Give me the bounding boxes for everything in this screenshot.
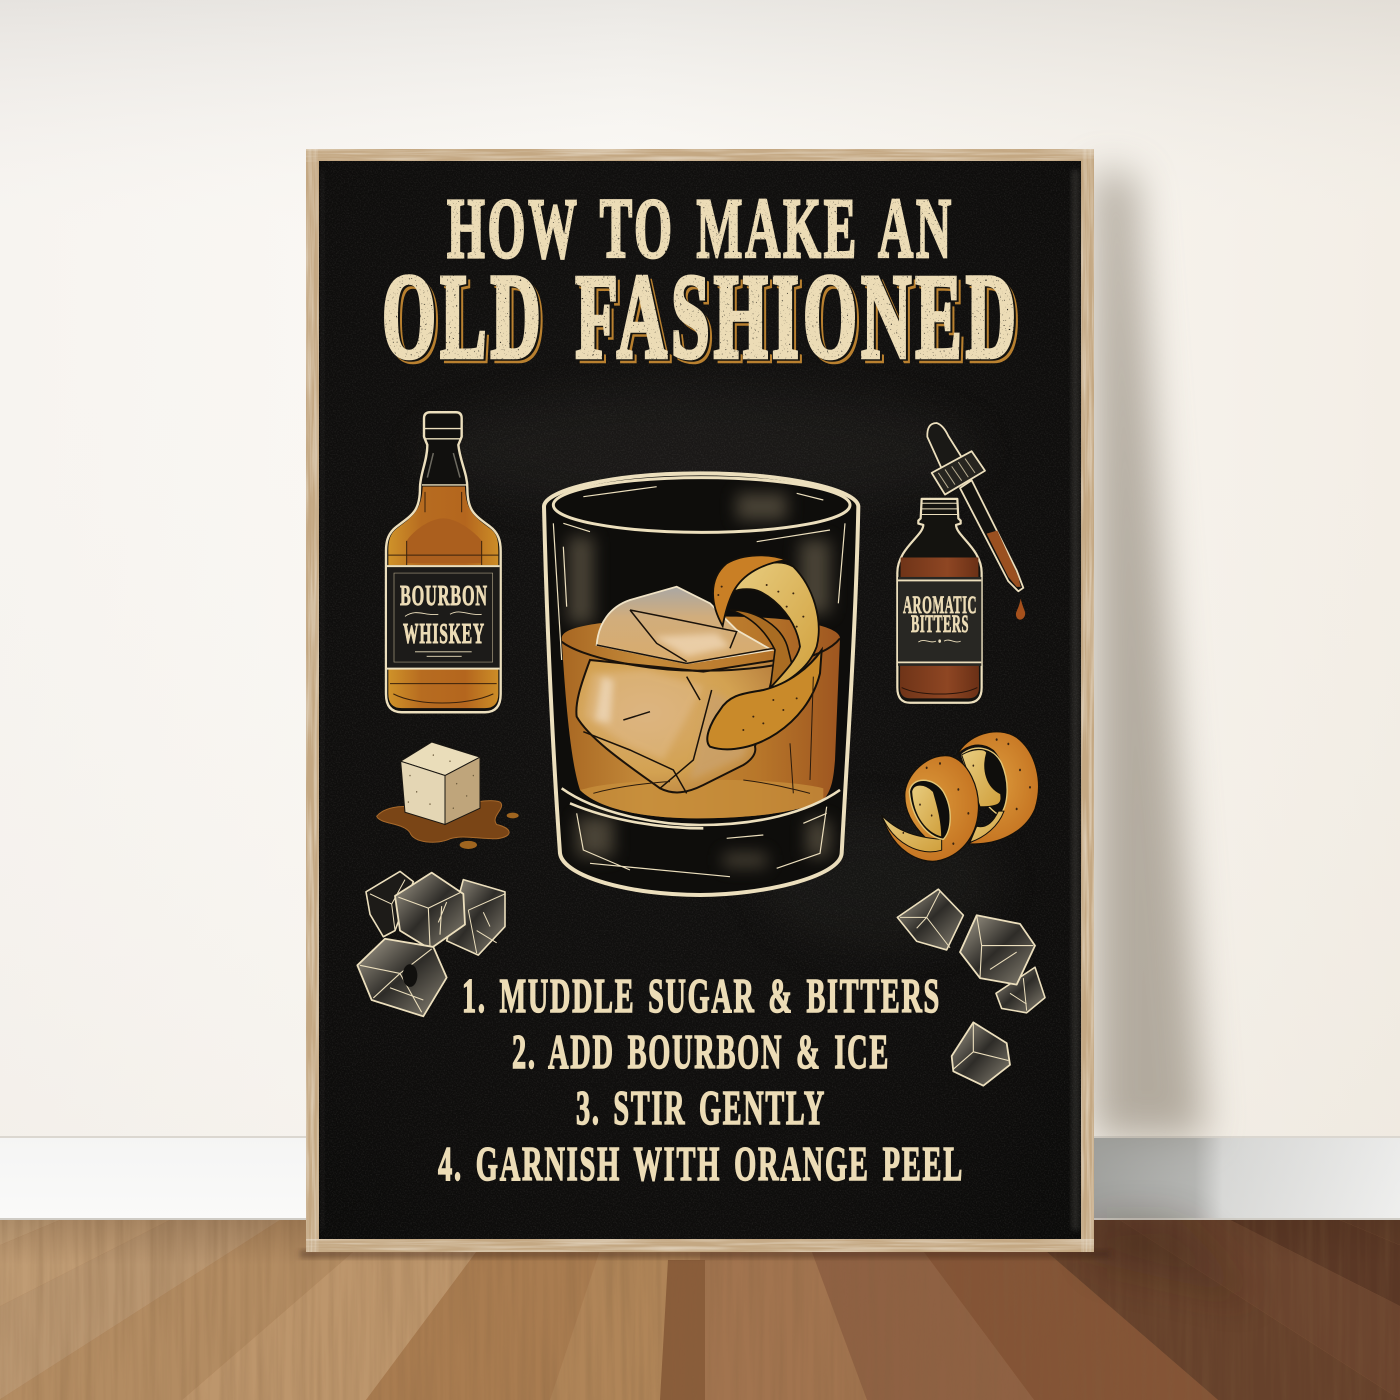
steps text xyxy=(438,968,964,1191)
cube speckles xyxy=(408,754,474,809)
title line 1: HOW TO MAKE AN xyxy=(447,180,954,276)
peel left lobe xyxy=(882,756,978,861)
peel right coil xyxy=(962,748,1007,815)
ice cube small xyxy=(996,967,1045,1013)
bottle label xyxy=(898,577,981,666)
falling drop xyxy=(1016,599,1025,620)
darker plank strip xyxy=(660,1260,705,1400)
dropper tube xyxy=(960,480,1023,591)
icon: ice cubes right cluster xyxy=(897,889,1045,1086)
liquid surface line xyxy=(562,638,840,671)
peel left yellow xyxy=(912,785,942,837)
glass body xyxy=(544,473,858,895)
glass base line xyxy=(562,788,840,828)
step 2: 2. ADD BOURBON & ICE xyxy=(512,1024,890,1079)
label xyxy=(387,565,500,669)
cast shadow of poster xyxy=(300,170,1400,1300)
garnish peel xyxy=(707,555,822,749)
peel right lobe xyxy=(957,732,1039,844)
poster chalkboard panel xyxy=(319,161,1081,1239)
icon: ice cubes left cluster xyxy=(357,871,505,1016)
ice cube xyxy=(576,587,777,793)
puddle drops xyxy=(507,813,519,818)
ice cube bottom xyxy=(952,1022,1010,1086)
bottle liquid xyxy=(388,487,498,708)
peel right yellow xyxy=(962,750,1001,807)
ice cube right xyxy=(447,880,505,955)
wooden floor xyxy=(0,1220,1400,1400)
title xyxy=(382,180,1024,388)
neck lines xyxy=(422,429,466,485)
icon: sugar cube with bitters xyxy=(377,742,519,849)
peel pores xyxy=(902,738,1031,845)
glass highlights xyxy=(553,487,845,877)
step 4: 4. GARNISH WITH ORANGE PEEL xyxy=(438,1136,964,1191)
bitters label text: BITTERS xyxy=(911,611,969,638)
peel right stripe xyxy=(970,811,1004,842)
puddle xyxy=(377,801,509,842)
ice cube top xyxy=(897,889,963,950)
dropper liquid xyxy=(987,531,1021,587)
dropper collar xyxy=(932,451,985,495)
poster frame xyxy=(306,149,1094,1252)
glass rim xyxy=(553,478,850,532)
ice cube center xyxy=(395,873,465,949)
label flourish xyxy=(405,612,482,656)
peel left tail xyxy=(882,815,942,852)
bourbon label text: BOURBON xyxy=(400,581,488,612)
label flourish xyxy=(918,640,961,642)
ice cube back left xyxy=(366,871,413,937)
ice cube large xyxy=(960,915,1035,985)
cube faces xyxy=(401,742,480,776)
bottle liquid xyxy=(900,557,979,698)
icon: bourbon whiskey bottle xyxy=(386,412,501,712)
bottle outline xyxy=(897,499,982,703)
icon: old fashioned glass xyxy=(544,473,858,895)
aromatic label text: AROMATIC xyxy=(903,592,977,619)
bottle body xyxy=(386,412,501,712)
baseboard xyxy=(0,1136,1400,1221)
whiskey liquid xyxy=(562,617,840,818)
ice cube bottom xyxy=(357,939,447,1016)
peel left coil xyxy=(909,780,950,839)
dropper bulb xyxy=(927,423,963,471)
icon: orange peel twist xyxy=(882,732,1039,861)
glass smudges xyxy=(568,493,830,867)
icon: aromatic bitters dropper xyxy=(927,423,1025,620)
step 1: 1. MUDDLE SUGAR & BITTERS xyxy=(462,968,941,1023)
icon: aromatic bitters bottle xyxy=(897,499,982,703)
step 3: 3. STIR GENTLY xyxy=(576,1080,826,1135)
whiskey label text: WHISKEY xyxy=(403,619,485,650)
